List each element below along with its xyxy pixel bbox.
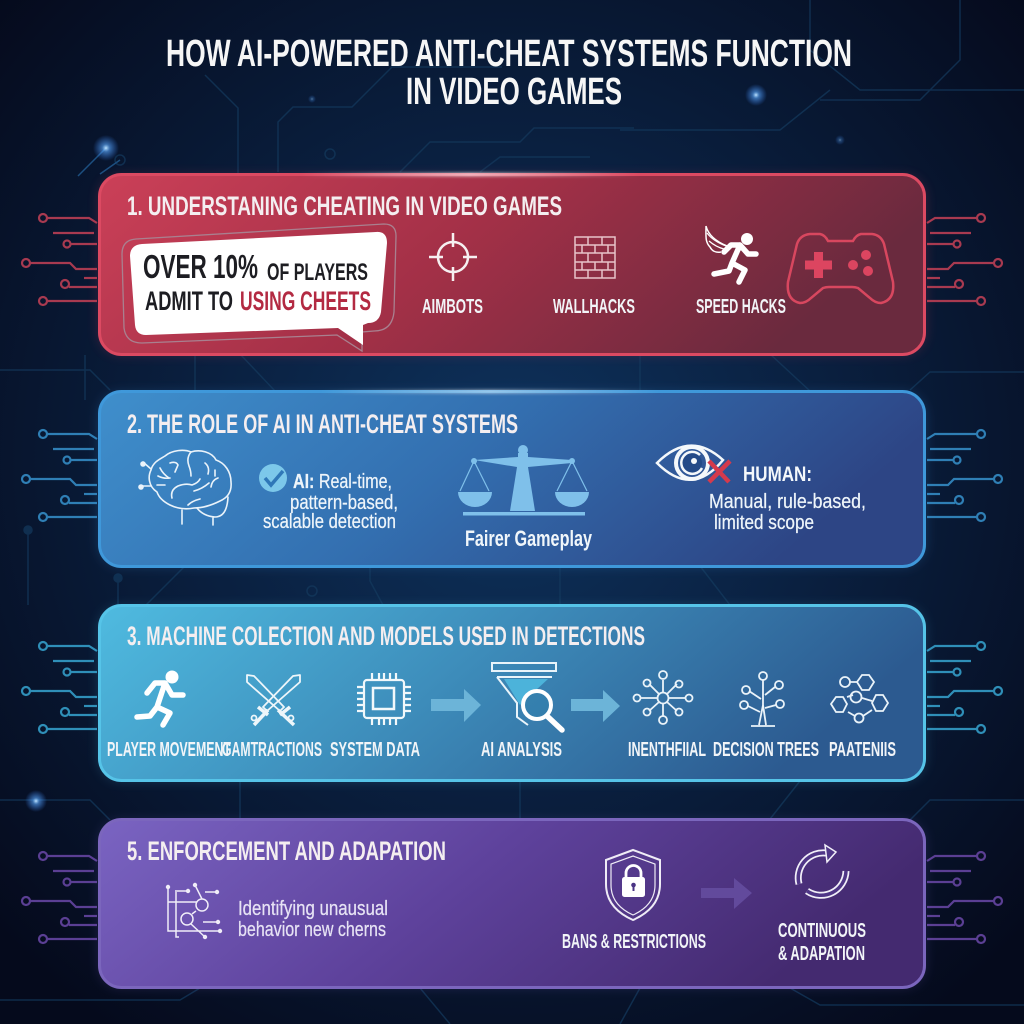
label: aimbots: AIMBOTS (422, 296, 483, 318)
callout: over 10 percent: OF PLAYERS (267, 259, 368, 286)
label: continuous adaptation (778, 920, 866, 965)
icon: shield lock (606, 850, 660, 920)
icon: brick wall (575, 237, 615, 278)
AI comparison text: pattern-based, (290, 492, 398, 514)
icon: scales (458, 445, 589, 516)
icon: check (259, 464, 287, 492)
panel: understanding cheating (99, 173, 925, 354)
icon: winged runner (706, 226, 756, 282)
enforcement description: Identifying unausual (238, 898, 388, 920)
icon: pattern hexagons (831, 675, 888, 722)
circuit traces: cyan (22, 642, 1002, 733)
icon: funnel with magnifier (492, 663, 562, 730)
icon: neural network (634, 671, 692, 724)
enforcement description: behavior new cherns (238, 919, 386, 941)
circuit traces: blue (22, 430, 1002, 521)
label: patents: PAATENIIS (829, 739, 896, 761)
icon: decision tree (740, 672, 784, 726)
panel: machine models (99, 606, 925, 780)
icon: cycle arrows (798, 845, 846, 895)
human comparison text: HUMAN: (743, 463, 812, 486)
label: decision trees: DECISION TREES (713, 739, 819, 761)
label: wallhacks: WALLHACKS (553, 296, 635, 318)
heading 5: 5. ENFORCEMENT AND ADAPATION (127, 836, 446, 866)
icon: gamepad (788, 234, 893, 303)
human comparison text: Manual, rule-based, (709, 491, 866, 513)
AI comparison text (259, 464, 398, 533)
icon: runner (137, 670, 183, 725)
AI comparison text: scalable detection (263, 511, 396, 533)
icon: behaviour graph (166, 883, 222, 939)
icon: chip (357, 673, 411, 725)
callout: over 10 percent: USING CHEETS (240, 286, 371, 316)
label: fairer gameplay: Fairer Gameplay (465, 526, 593, 551)
label: system data: SYSTEM DATA (330, 739, 420, 761)
human comparison text: limited scope (714, 512, 814, 534)
circuit traces: purple (22, 852, 1002, 943)
AI comparison text: AI: Real-time, (293, 471, 392, 493)
icon: crossed swords (247, 675, 300, 725)
title (166, 33, 852, 113)
icon: crosshair (429, 233, 477, 281)
label: continuous adaptation: & ADAPATION (778, 943, 865, 965)
human comparison text (709, 463, 866, 534)
label: speed hacks: SPEED HACKS (696, 296, 786, 318)
arrow: to models (571, 690, 620, 722)
label: continuous adaptation: CONTINUOUS (778, 920, 866, 942)
label: inenthfiial: INENTHFIIAL (628, 739, 706, 761)
title: IN VIDEO GAMES (406, 71, 622, 113)
arrow: to AI analysis (431, 689, 481, 722)
icon: eye with cross (657, 446, 730, 482)
enforcement description (238, 898, 388, 941)
panel: role of AI (99, 390, 925, 566)
label: game interactions: GAMTRACTIONS (222, 739, 322, 761)
heading 3: 3. MACHINE COLECTION AND MODELS USED IN DETECTIONS (127, 621, 645, 651)
heading 2: 2. THE ROLE OF AI IN ANTI-CHEAT SYSTEMS (127, 409, 518, 439)
heading 1: 1. UNDERSTANING CHEATING IN VIDEO GAMES (127, 191, 562, 221)
circuit traces: red (22, 214, 1002, 305)
icon: brain (139, 450, 231, 525)
panel: enforcement (99, 820, 925, 988)
callout: over 10 percent: ADMIT TO (145, 286, 233, 316)
arrow: to continuous (701, 878, 752, 909)
label: bans and restrictions: BANS & RESTRICTIONS (562, 931, 706, 953)
label: player movement: PLAYER MOVEMENT (107, 739, 231, 761)
callout: over 10 percent (122, 224, 396, 351)
label: AI analysis: AI ANALYSIS (481, 739, 562, 761)
callout: over 10 percent: OVER 10% (143, 248, 258, 285)
